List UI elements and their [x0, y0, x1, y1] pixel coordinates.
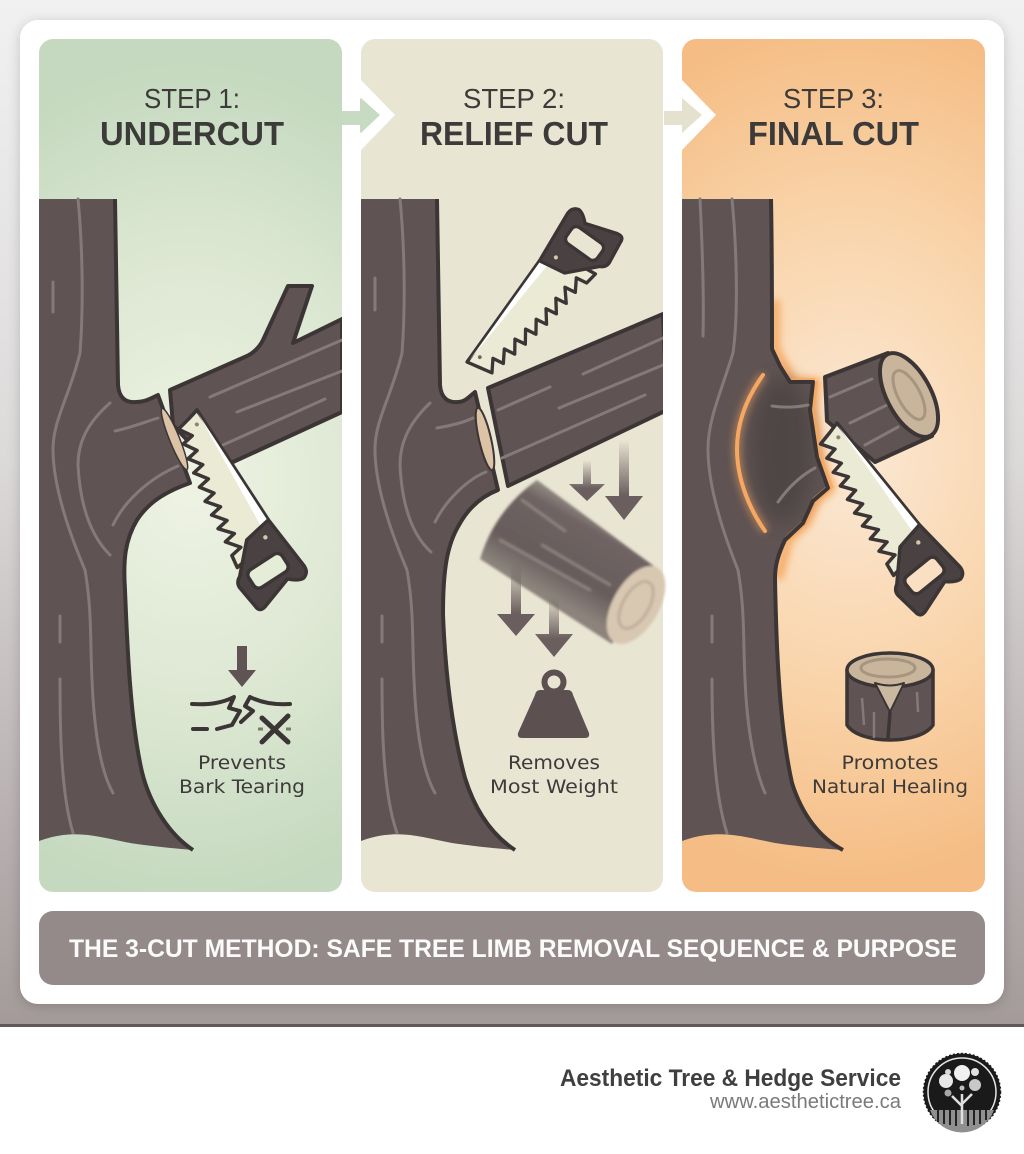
heading: step 3: FINAL CUT: [748, 115, 919, 152]
heading: step 3: STEP 3:: [783, 83, 884, 114]
footer brand text: [560, 1065, 902, 1113]
caption: prevents bark tearing: [179, 752, 305, 798]
panel: step 1 undercut: [39, 39, 342, 892]
title bar: THE 3-CUT METHOD: SAFE TREE LIMB REMOVAL SEQUENCE & PURPOSE: [69, 935, 957, 963]
caption: promotes natural healing: Natural Healing: [812, 776, 968, 798]
footer brand text: Aesthetic Tree & Hedge Service: [560, 1065, 901, 1092]
arrow: step 1 to step 2: [342, 80, 395, 150]
arrows: falling weight: [497, 440, 643, 657]
icon: saw 2: [463, 203, 626, 396]
heading: step 3: [748, 83, 919, 152]
heading: step 1: [100, 83, 284, 152]
icon: saw 3: [790, 420, 968, 619]
footer brand text: www.aesthetictree.ca: [709, 1091, 902, 1113]
heading: step 2: [420, 83, 608, 152]
illustration: falling limb: [480, 480, 677, 654]
illustration: cut limb segment: [825, 344, 950, 462]
icon: healed stump: [847, 653, 933, 740]
heading: step 1: STEP 1:: [144, 83, 240, 114]
icon: bark tearing prevented: [192, 646, 291, 742]
heading: step 2: STEP 2:: [463, 83, 565, 114]
icon: weight: [518, 672, 589, 738]
arrow: step 2 to step 3: [664, 98, 702, 133]
caption: promotes natural healing: Promotes: [842, 752, 938, 774]
illustration: tree trunk 1: [39, 199, 193, 850]
icon: saw 1: [146, 407, 311, 613]
illustration: limb stub with undercut: [170, 286, 342, 470]
heading: step 2: RELIEF CUT: [420, 115, 608, 152]
heading: step 1: UNDERCUT: [100, 115, 284, 152]
logo: [924, 1054, 1000, 1133]
panel: step 3 final cut: [682, 39, 985, 892]
caption: prevents bark tearing: Bark Tearing: [179, 776, 305, 798]
illustration: tree trunk 2: [361, 199, 515, 850]
caption: prevents bark tearing: Prevents: [198, 752, 286, 774]
caption: removes most weight: [490, 752, 618, 798]
illustration: limb 2: [488, 314, 667, 486]
title bar: [39, 911, 985, 985]
caption: removes most weight: Most Weight: [490, 776, 618, 798]
illustration: tree trunk 3 with healing collar: [682, 199, 843, 850]
caption: promotes natural healing: [812, 752, 968, 798]
caption: removes most weight: Removes: [508, 752, 600, 774]
panel: step 2 relief cut: [361, 39, 677, 892]
